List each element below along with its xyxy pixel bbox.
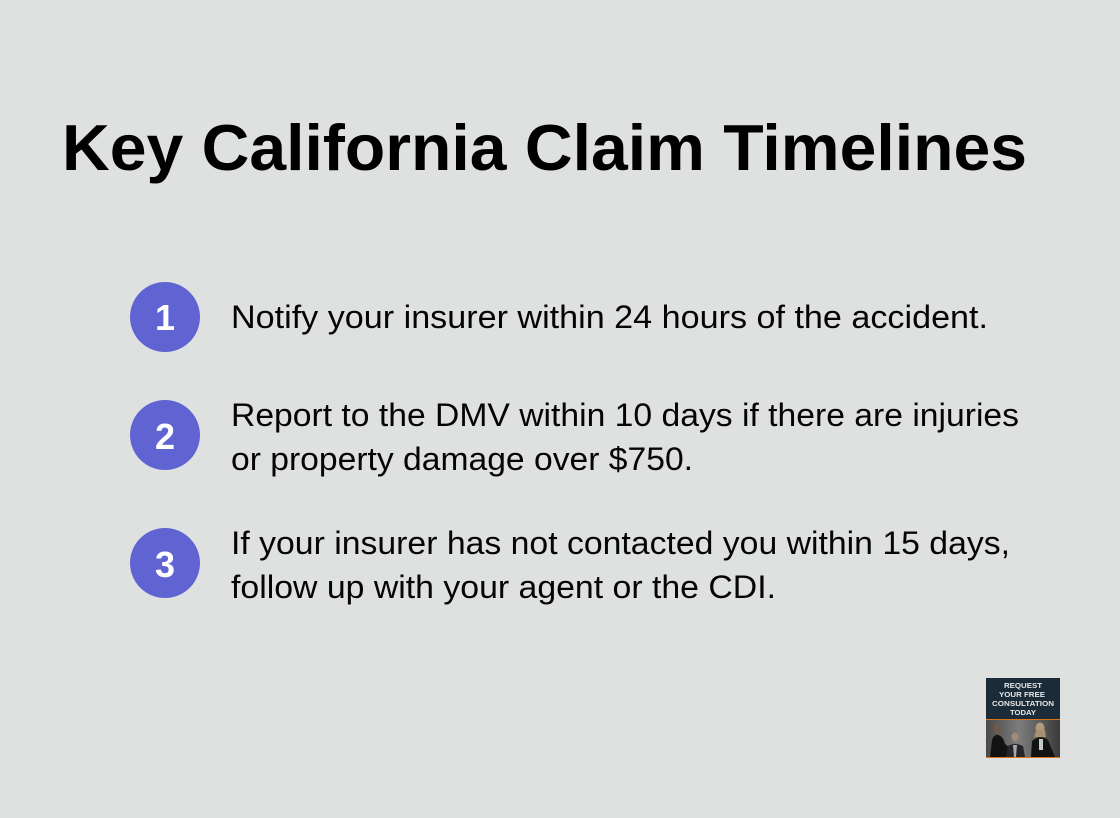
step 2 number badge [130,400,200,470]
step 3 number badge [130,528,200,598]
badge text: REQUEST [1004,681,1043,690]
step 3 text [231,525,1010,605]
badge photo figures [990,722,1055,757]
badge text: CONSULTATION [992,699,1054,708]
step 1 number badge [130,282,200,352]
consultation badge [986,678,1060,758]
step 2 [130,397,1019,477]
step 1 [130,282,988,352]
step 3 number badge: 3 [155,544,175,585]
step 3 [130,525,1010,605]
badge text [992,681,1054,717]
step 2 number badge: 2 [155,416,175,457]
step 1 number badge: 1 [155,297,175,338]
step 3 text: follow up with your agent or the CDI. [231,569,776,605]
step 1 text: Notify your insurer within 24 hours of the accident. [231,299,988,335]
title: Key California Claim Timelines [62,111,1027,184]
step 3 text: If your insurer has not contacted you within 15 days, [231,525,1010,561]
badge text: TODAY [1010,708,1036,717]
step 2 text [231,397,1019,477]
badge text: YOUR FREE [999,690,1045,699]
step 2 text: or property damage over $750. [231,441,693,477]
step 2 text: Report to the DMV within 10 days if there are injuries [231,397,1019,433]
